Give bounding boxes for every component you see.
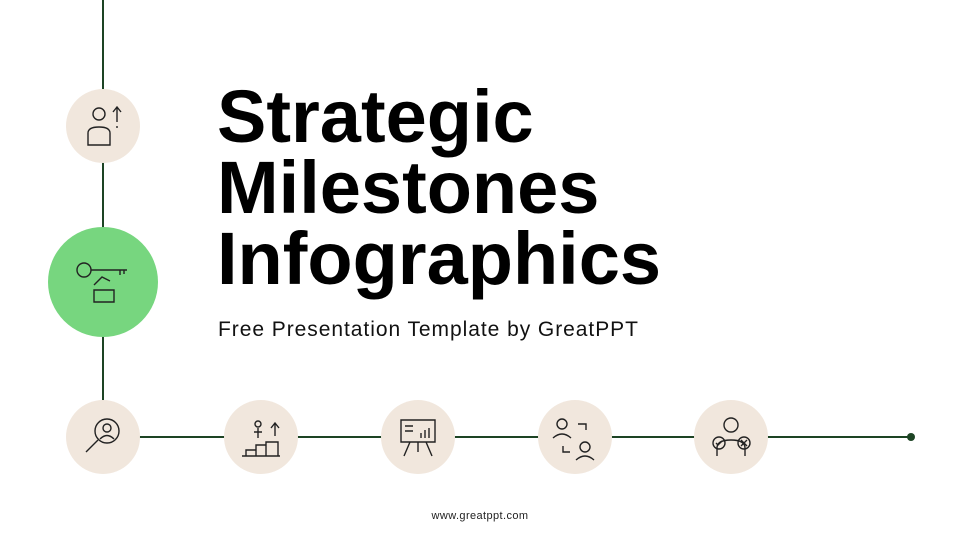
title: Strategic: [217, 75, 534, 158]
footer url: www.greatppt.com: [432, 510, 528, 522]
subtitle: Free Presentation Template by GreatPPT: [218, 318, 639, 341]
icon: people exchange: [538, 400, 612, 474]
title: [217, 75, 661, 300]
icon: stairs growth: [224, 400, 298, 474]
icon: key in hand (green): [48, 227, 158, 337]
icon: magnifier person: [66, 400, 140, 474]
icon: presentation board: [381, 400, 455, 474]
icon: person with arrow: [66, 89, 140, 163]
title: Milestones: [217, 146, 599, 229]
title: Infographics: [217, 217, 661, 300]
icon: person with check/cross: [694, 400, 768, 474]
